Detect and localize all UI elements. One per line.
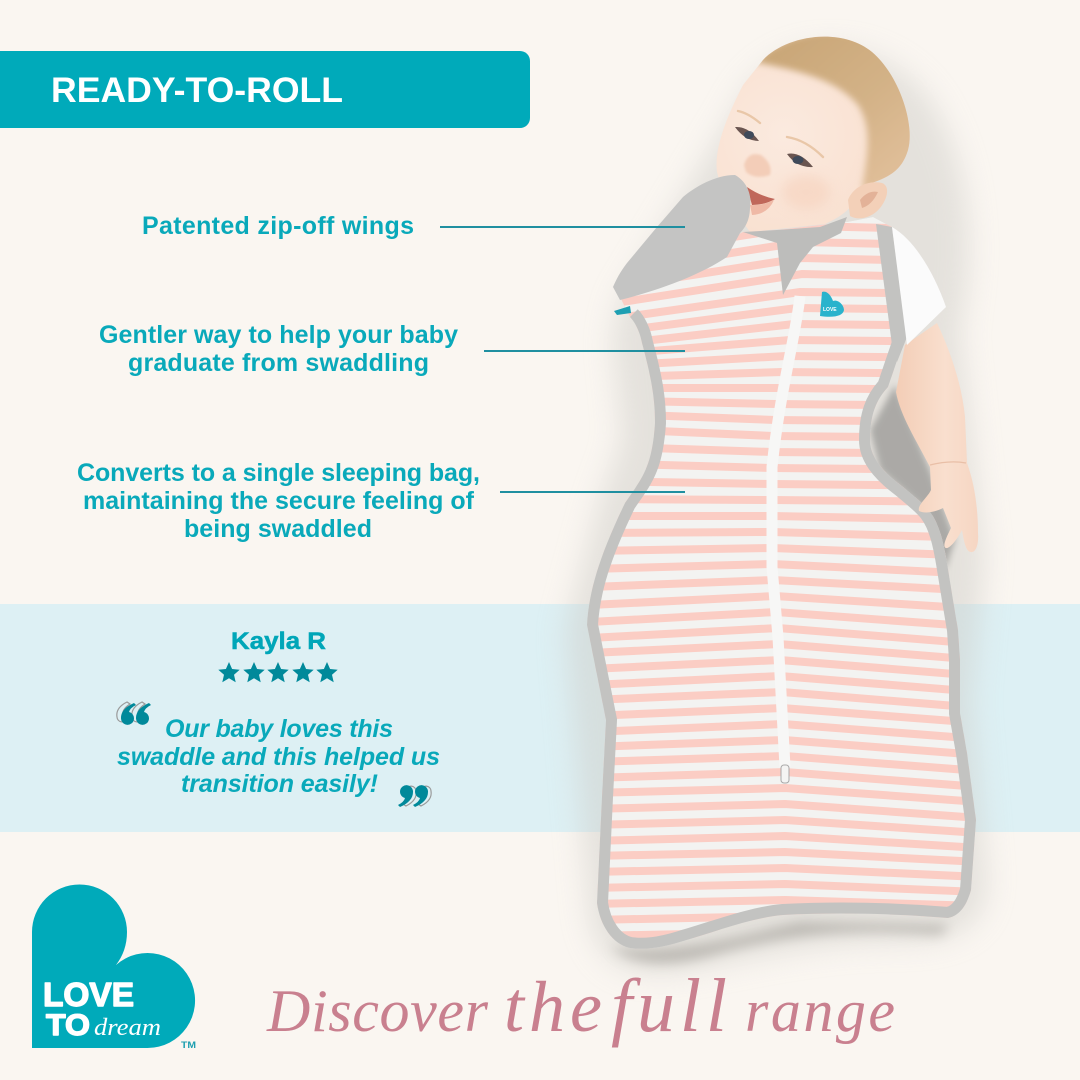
feature: single sleeping bag: Converts to a single sleeping bag, xyxy=(77,459,480,487)
review name: Kayla R xyxy=(231,628,326,655)
heading banner xyxy=(0,51,530,128)
heading text: READY-TO-ROLL xyxy=(51,71,343,110)
wing zip tab xyxy=(614,306,631,315)
script tagline: the xyxy=(504,967,602,1047)
feature: graduate from swaddling: Gentler way to help your baby xyxy=(99,321,458,349)
shadow behind baby xyxy=(565,49,987,973)
pink stripes xyxy=(590,226,980,936)
brand heart tag: LOVE xyxy=(823,307,837,313)
lower lip xyxy=(750,200,774,215)
logo: TM xyxy=(181,1040,196,1051)
logo: TO xyxy=(46,1009,90,1042)
review quote: Our baby loves this xyxy=(165,715,393,743)
eyes xyxy=(735,127,759,141)
white sleeve xyxy=(892,227,946,345)
feature: single sleeping bag: being swaddled xyxy=(184,515,372,543)
feature: zip-off wings: Patented zip-off wings xyxy=(142,212,414,240)
icon: opening quote marks xyxy=(117,702,151,725)
rating stars xyxy=(218,662,338,682)
cheek blush xyxy=(782,175,830,209)
script tagline xyxy=(266,964,895,1048)
review quote: transition easily! xyxy=(181,770,378,798)
baby head xyxy=(717,32,919,232)
grey collar xyxy=(743,217,847,295)
brand heart tag xyxy=(820,292,844,317)
icon: closing quote marks xyxy=(398,785,431,807)
face xyxy=(717,37,910,232)
script tagline: full xyxy=(611,964,727,1048)
feature: graduate from swaddling: graduate from swaddling xyxy=(128,349,429,377)
zipper pull xyxy=(781,765,789,783)
zipper xyxy=(772,296,800,767)
grey binding xyxy=(587,317,976,949)
logo: LOVE xyxy=(43,976,134,1013)
sleeping bag body xyxy=(587,217,980,949)
feature: graduate from swaddling xyxy=(99,321,458,377)
review band xyxy=(0,604,1080,832)
mouth xyxy=(747,187,775,205)
hair xyxy=(758,36,910,186)
script tagline: Discover xyxy=(266,978,489,1044)
feature: single sleeping bag: maintaining the secure feeling of xyxy=(83,487,475,515)
brows xyxy=(738,111,823,157)
grey armhole band xyxy=(876,224,907,362)
grey zip-off wing xyxy=(613,175,750,315)
feature: single sleeping bag xyxy=(77,459,480,543)
review quote xyxy=(117,715,440,798)
nose xyxy=(744,154,771,177)
ear xyxy=(848,182,887,218)
logo xyxy=(32,885,196,1051)
baby arm and hand xyxy=(896,323,978,552)
script tagline: range xyxy=(745,978,895,1044)
callout lines xyxy=(440,227,685,492)
review quote: swaddle and this helped us xyxy=(117,743,440,771)
logo: dream xyxy=(94,1015,161,1041)
